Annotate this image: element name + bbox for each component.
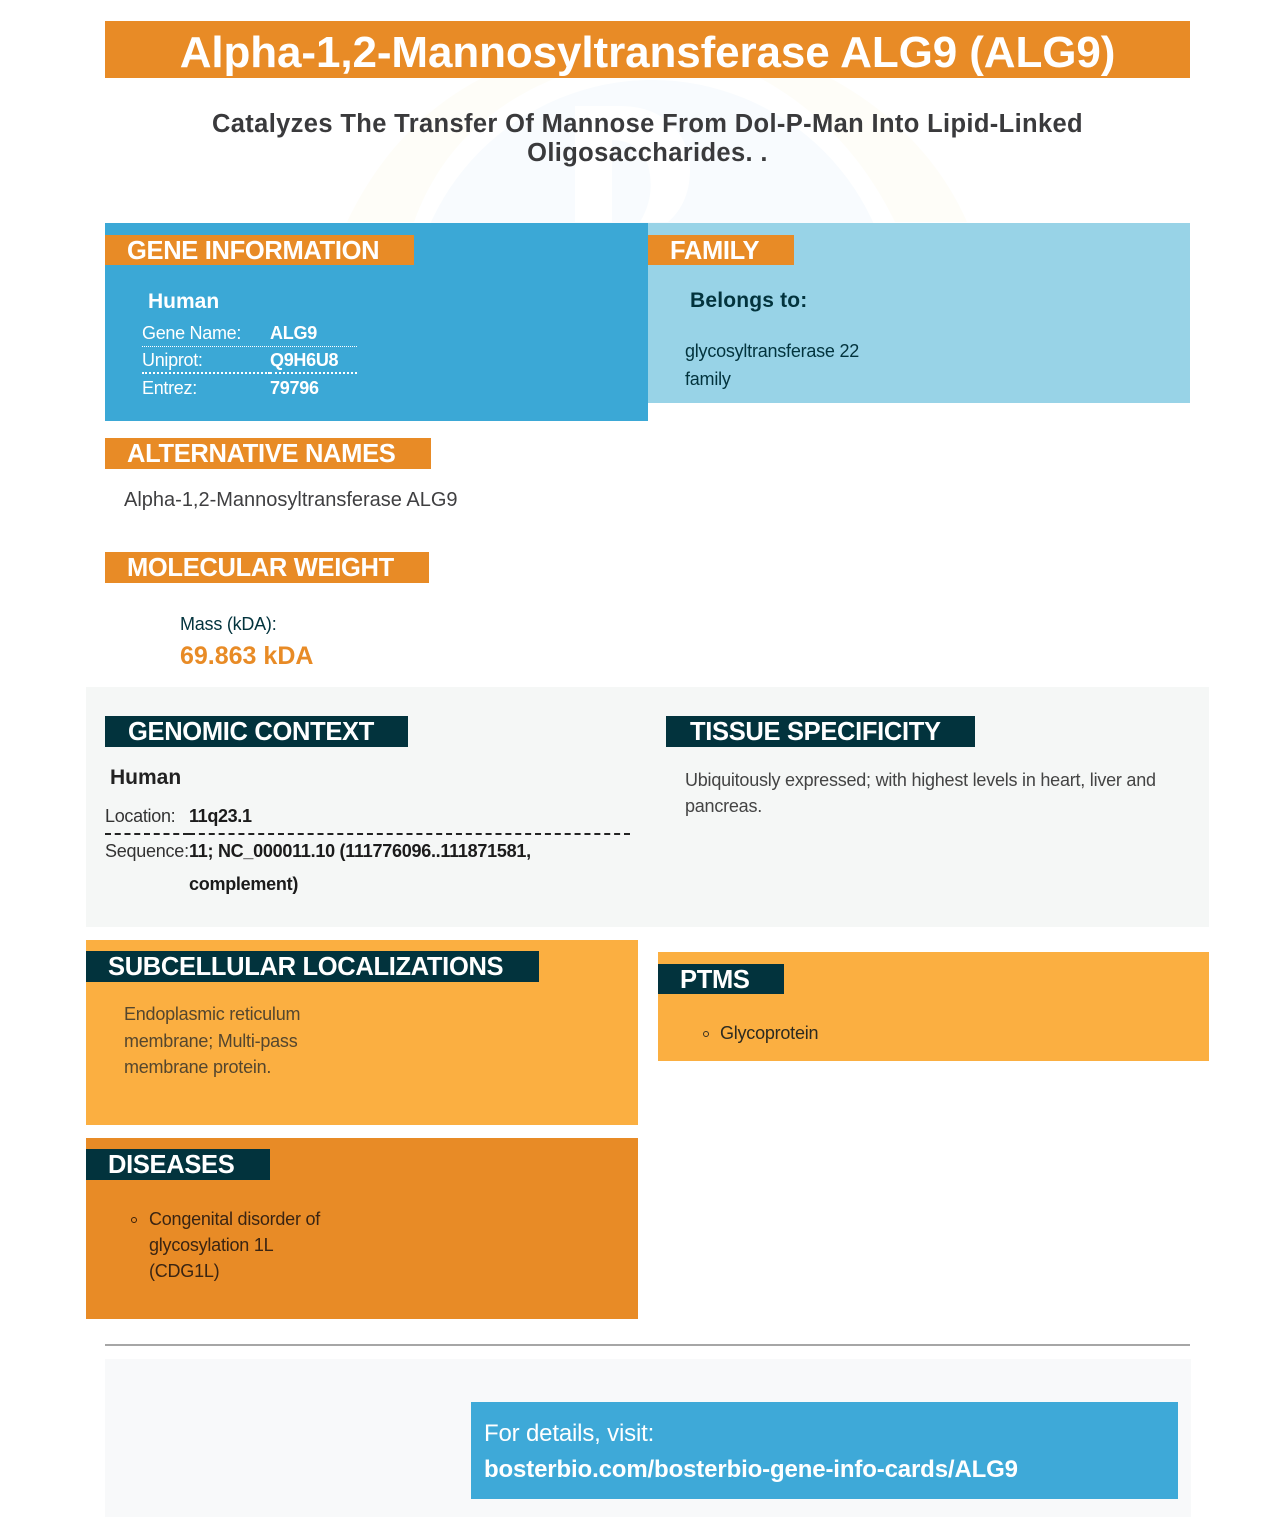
gene identifiers table: Gene Name:: [142, 323, 241, 343]
heading: molecular weight: MOLECULAR WEIGHT: [127, 554, 394, 582]
family text: family: [685, 369, 731, 389]
gene identifiers table: Q9H6U8: [270, 350, 338, 370]
panel: subcellular localizations: [86, 940, 638, 1125]
heading: ptms: [658, 964, 784, 994]
localization text: membrane; Multi-pass: [124, 1031, 297, 1051]
alternative name text: Alpha-1,2-Mannosyltransferase ALG9: [124, 489, 458, 511]
heading: diseases: DISEASES: [108, 1151, 234, 1179]
heading: family: FAMILY: [670, 237, 759, 265]
heading: ptms: PTMS: [680, 966, 750, 994]
heading: subcellular localizations: SUBCELLULAR LOCALIZATIONS: [108, 953, 503, 981]
localization text: [124, 1004, 300, 1077]
genomic location table: complement): [189, 874, 298, 894]
panel: diseases: [86, 1138, 638, 1319]
panel: family: [648, 223, 1190, 403]
disease list item: [131, 1209, 320, 1281]
species label: Human: [110, 766, 181, 789]
belongs to label: Belongs to:: [690, 289, 807, 312]
gene identifiers table: 79796: [270, 378, 319, 398]
genomic location table: [105, 806, 630, 894]
gene identifiers table: ALG9: [270, 323, 317, 343]
footer panel: [105, 1359, 1191, 1517]
gene identifiers table: Uniprot:: [142, 350, 203, 370]
genomic location table: 11q23.1: [189, 806, 252, 826]
panel: alternative names: [105, 438, 458, 511]
watermark logo: [0, 0, 1288, 230]
disease list item: (CDG1L): [149, 1261, 219, 1281]
subtitle: Catalyzes The Transfer Of Mannose From Dol-P-Man Into Lipid-Linked: [212, 110, 1083, 138]
callout url: bosterbio.com/bosterbio-gene-info-cards/ALG9: [484, 1456, 1018, 1483]
callout: details link: [471, 1402, 1178, 1499]
heading: gene information: GENE INFORMATION: [127, 237, 379, 265]
disease list item: glycosylation 1L: [149, 1235, 273, 1255]
genomic location table: 11; NC_000011.10 (111776096..111871581,: [189, 841, 531, 861]
mass label: Mass (kDA):: [180, 614, 276, 634]
heading: alternative names: ALTERNATIVE NAMES: [127, 440, 395, 468]
species label: Human: [148, 290, 219, 313]
subtitle: Oligosaccharides. .: [527, 138, 768, 166]
title: Alpha-1,2-Mannosyltransferase ALG9 (ALG9): [180, 28, 1115, 77]
gene identifiers table: [142, 323, 357, 398]
tissue text: pancreas.: [685, 796, 762, 816]
genomic location table: Location:: [105, 806, 175, 826]
heading: tissue specificity: TISSUE SPECIFICITY: [690, 718, 941, 746]
panel: ptms: [658, 952, 1209, 1061]
genomic location table: Sequence:: [105, 841, 189, 861]
disease list item: Congenital disorder of: [149, 1209, 320, 1229]
localization text: membrane protein.: [124, 1057, 271, 1077]
callout label: For details, visit:: [484, 1420, 654, 1447]
gene identifiers table: Entrez:: [142, 378, 197, 398]
heading: family: [648, 235, 794, 265]
tissue text: [685, 770, 1156, 816]
tissue text: Ubiquitously expressed; with highest levels in heart, liver and: [685, 770, 1156, 790]
heading: diseases: [86, 1149, 270, 1180]
panel: gene information: [105, 223, 648, 421]
panel: genomic band: [86, 687, 1209, 927]
family text: glycosyltransferase 22: [685, 341, 859, 361]
panel: molecular weight: [105, 552, 429, 670]
family text: [685, 341, 859, 389]
subtitle: [212, 110, 1083, 166]
mass value: 69.863 kDA: [180, 642, 313, 670]
heading: genomic context: GENOMIC CONTEXT: [128, 718, 374, 746]
localization text: Endoplasmic reticulum: [124, 1004, 300, 1024]
ptm list item: Glycoprotein: [720, 1023, 818, 1043]
